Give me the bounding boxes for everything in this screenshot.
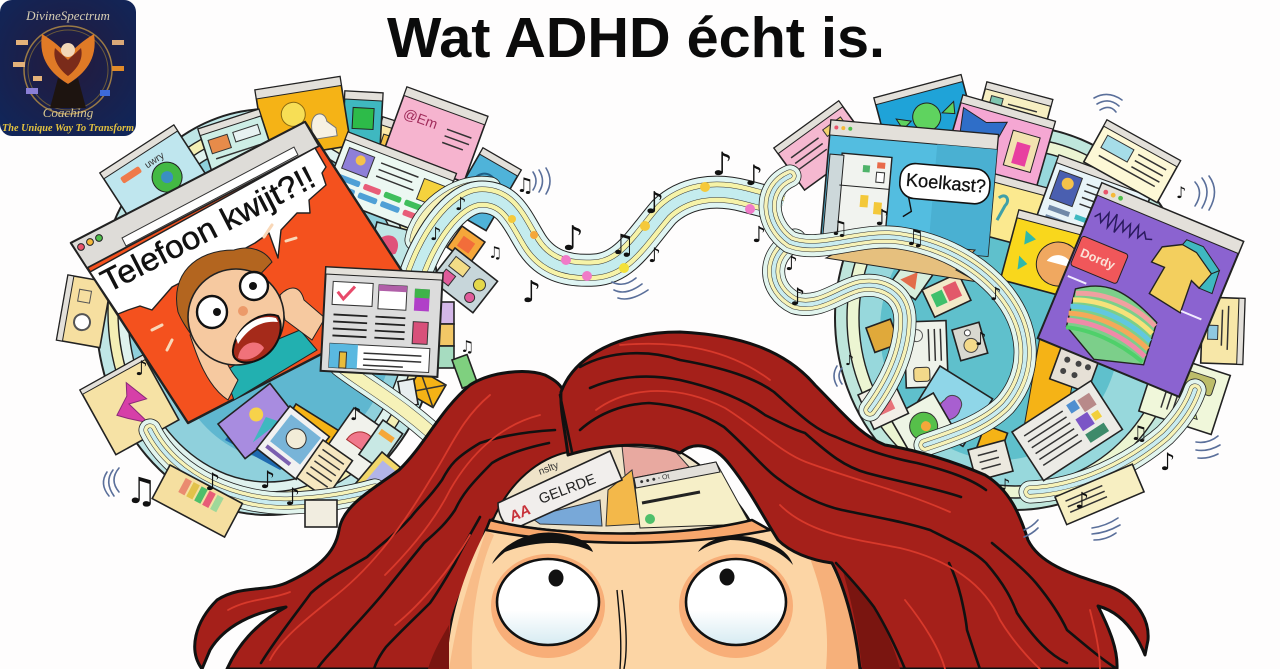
hair left lobe <box>195 372 568 669</box>
music notes: ♪ <box>790 283 805 311</box>
music notes: ♫ <box>905 226 925 251</box>
card: big red telefoon <box>71 122 422 423</box>
logo text: Coaching <box>43 105 94 120</box>
nose lines <box>617 590 626 669</box>
music notes: ♪ <box>260 466 275 494</box>
card: top cream <box>976 82 1053 140</box>
card: pink figure <box>80 355 179 455</box>
music notes: ♫ <box>125 471 157 512</box>
tag <box>1070 236 1129 284</box>
music notes: ♫ <box>1130 421 1148 445</box>
fridge <box>822 152 892 247</box>
card: blue <box>530 500 602 526</box>
title: Wat ADHD écht is. <box>387 6 885 70</box>
hair strands <box>228 344 1117 669</box>
logo <box>0 0 136 136</box>
card: cream bottom paper <box>1055 464 1144 525</box>
card: pink blue <box>943 95 1055 193</box>
music notes: ♫ <box>460 337 474 356</box>
music notes: ♪ <box>1000 475 1010 494</box>
table <box>826 240 978 282</box>
card: yellow smiley <box>255 77 351 159</box>
card: doc <box>1033 155 1153 261</box>
card: yellow orange <box>606 470 640 526</box>
card: gelrde: GELRDE <box>537 471 598 508</box>
left swirl <box>57 77 521 537</box>
tag: Dordy <box>1078 246 1117 273</box>
card: pink: @Em <box>401 105 440 132</box>
card: pink blob <box>322 408 398 485</box>
music notes: ♪ <box>455 194 466 215</box>
card: gear <box>100 125 209 227</box>
face <box>447 520 860 669</box>
music notes: ♫ <box>516 173 534 197</box>
card: pale info <box>324 132 456 237</box>
music notes: ♪ <box>845 353 854 369</box>
music notes: ♪ <box>522 275 541 310</box>
card: teal browser <box>198 109 274 177</box>
card: orange note <box>866 319 899 352</box>
music notes: ♪ <box>135 356 148 380</box>
window text: ● ● ● ◦ Ot <box>639 473 670 486</box>
card: pink white <box>858 379 908 429</box>
card: blue heart <box>910 366 993 446</box>
music notes: ♫ <box>488 243 502 262</box>
card: red green photo <box>922 273 971 317</box>
card: small strip <box>968 440 1013 481</box>
card: purple clothes <box>1038 183 1243 397</box>
card: orange strip <box>359 420 403 468</box>
left brow <box>492 532 593 564</box>
hair right lobe <box>561 332 1148 669</box>
main ribbon <box>412 182 782 285</box>
logo text <box>2 8 134 134</box>
card: green red photo <box>891 258 933 300</box>
logo text: The Unique Way To Transform <box>2 123 134 134</box>
music notes: ♪ <box>1160 448 1175 476</box>
card: portrait <box>257 406 329 479</box>
music notes: ♪ <box>752 223 766 248</box>
card: cream target <box>57 275 111 348</box>
bottom ribbon <box>150 430 375 503</box>
sound waves <box>103 94 1220 540</box>
card: gelrde: nslty <box>537 460 560 478</box>
card: koelkast <box>820 120 998 256</box>
card: bottom cream <box>152 465 242 537</box>
music notes: ♪ <box>712 145 732 183</box>
card: striped pink <box>622 446 690 484</box>
right swirl rings <box>835 126 1195 510</box>
card: cream window <box>634 462 750 528</box>
card: striped note <box>297 440 352 498</box>
music notes: ♪ <box>975 329 986 350</box>
card: gelrde <box>498 451 622 530</box>
card: yellow orange <box>1000 210 1090 299</box>
music notes: ♪ <box>205 468 220 496</box>
music notes: ♪ <box>648 243 661 267</box>
music notes: ♫ <box>830 216 848 240</box>
right loops <box>770 176 1025 445</box>
small cards right of left swirl <box>367 222 498 408</box>
card: pale yellow <box>364 117 461 201</box>
card: yellow pale <box>975 173 1049 248</box>
music notes: ♪ <box>562 219 584 259</box>
forehead opening contents <box>492 444 752 534</box>
card: small yellow <box>975 425 1008 461</box>
card: gear: uwry <box>143 150 167 171</box>
koelkast bubble: Koelkast? <box>905 169 987 197</box>
card: form <box>321 267 443 377</box>
card: pink <box>383 87 488 182</box>
card: green face <box>874 75 979 166</box>
card: small paper <box>305 500 337 527</box>
card: white notes <box>904 321 948 388</box>
left eye <box>491 554 605 658</box>
card: speaker <box>952 322 988 361</box>
card: keypad <box>1050 345 1100 393</box>
inner ribbon <box>340 365 452 452</box>
card: blue spiral <box>448 148 521 231</box>
card: lilac <box>350 452 411 515</box>
music notes: ♪ <box>1075 489 1089 514</box>
music notes: ♪ <box>285 483 300 511</box>
speech burst <box>90 148 326 314</box>
music notes <box>125 145 1186 514</box>
music notes: ♪ <box>990 284 1002 305</box>
music notes: ♪ <box>645 186 664 221</box>
card: gelrde: AA <box>506 501 533 526</box>
card: purple <box>218 383 297 459</box>
shirt <box>1138 236 1218 318</box>
swirl rings <box>96 109 440 515</box>
card: teal green <box>342 91 383 149</box>
right brow <box>698 536 793 565</box>
card: pink left <box>774 101 869 190</box>
music notes: ♪ <box>430 224 442 245</box>
man <box>152 225 325 400</box>
top left strand <box>416 187 490 240</box>
card: green frog <box>890 393 955 456</box>
telefoon text: Telefoon kwijt?!! <box>95 159 321 299</box>
clothes pile <box>1053 276 1166 378</box>
logo text: DivineSpectrum <box>25 8 110 23</box>
right swirl <box>774 75 1245 525</box>
browser bar <box>71 122 319 268</box>
forehead band <box>486 520 770 543</box>
music notes: ♪ <box>785 251 798 275</box>
card: newspaper <box>1012 381 1122 481</box>
card: pale green right <box>1139 352 1230 434</box>
music ribbons <box>412 176 1025 445</box>
window text <box>634 462 720 524</box>
music notes: ♪ <box>875 206 889 231</box>
music notes: ♫ <box>610 228 635 261</box>
card: cream right <box>1201 297 1245 364</box>
koelkast bubble <box>897 162 991 224</box>
music notes: ♪ <box>1176 183 1186 202</box>
music notes: ♪ <box>745 159 763 192</box>
right eye <box>679 554 793 658</box>
lower ribbon right <box>1030 390 1195 492</box>
card: orange note <box>274 404 340 467</box>
music notes: ♪ <box>350 404 362 425</box>
card: cream lines <box>1084 120 1180 203</box>
